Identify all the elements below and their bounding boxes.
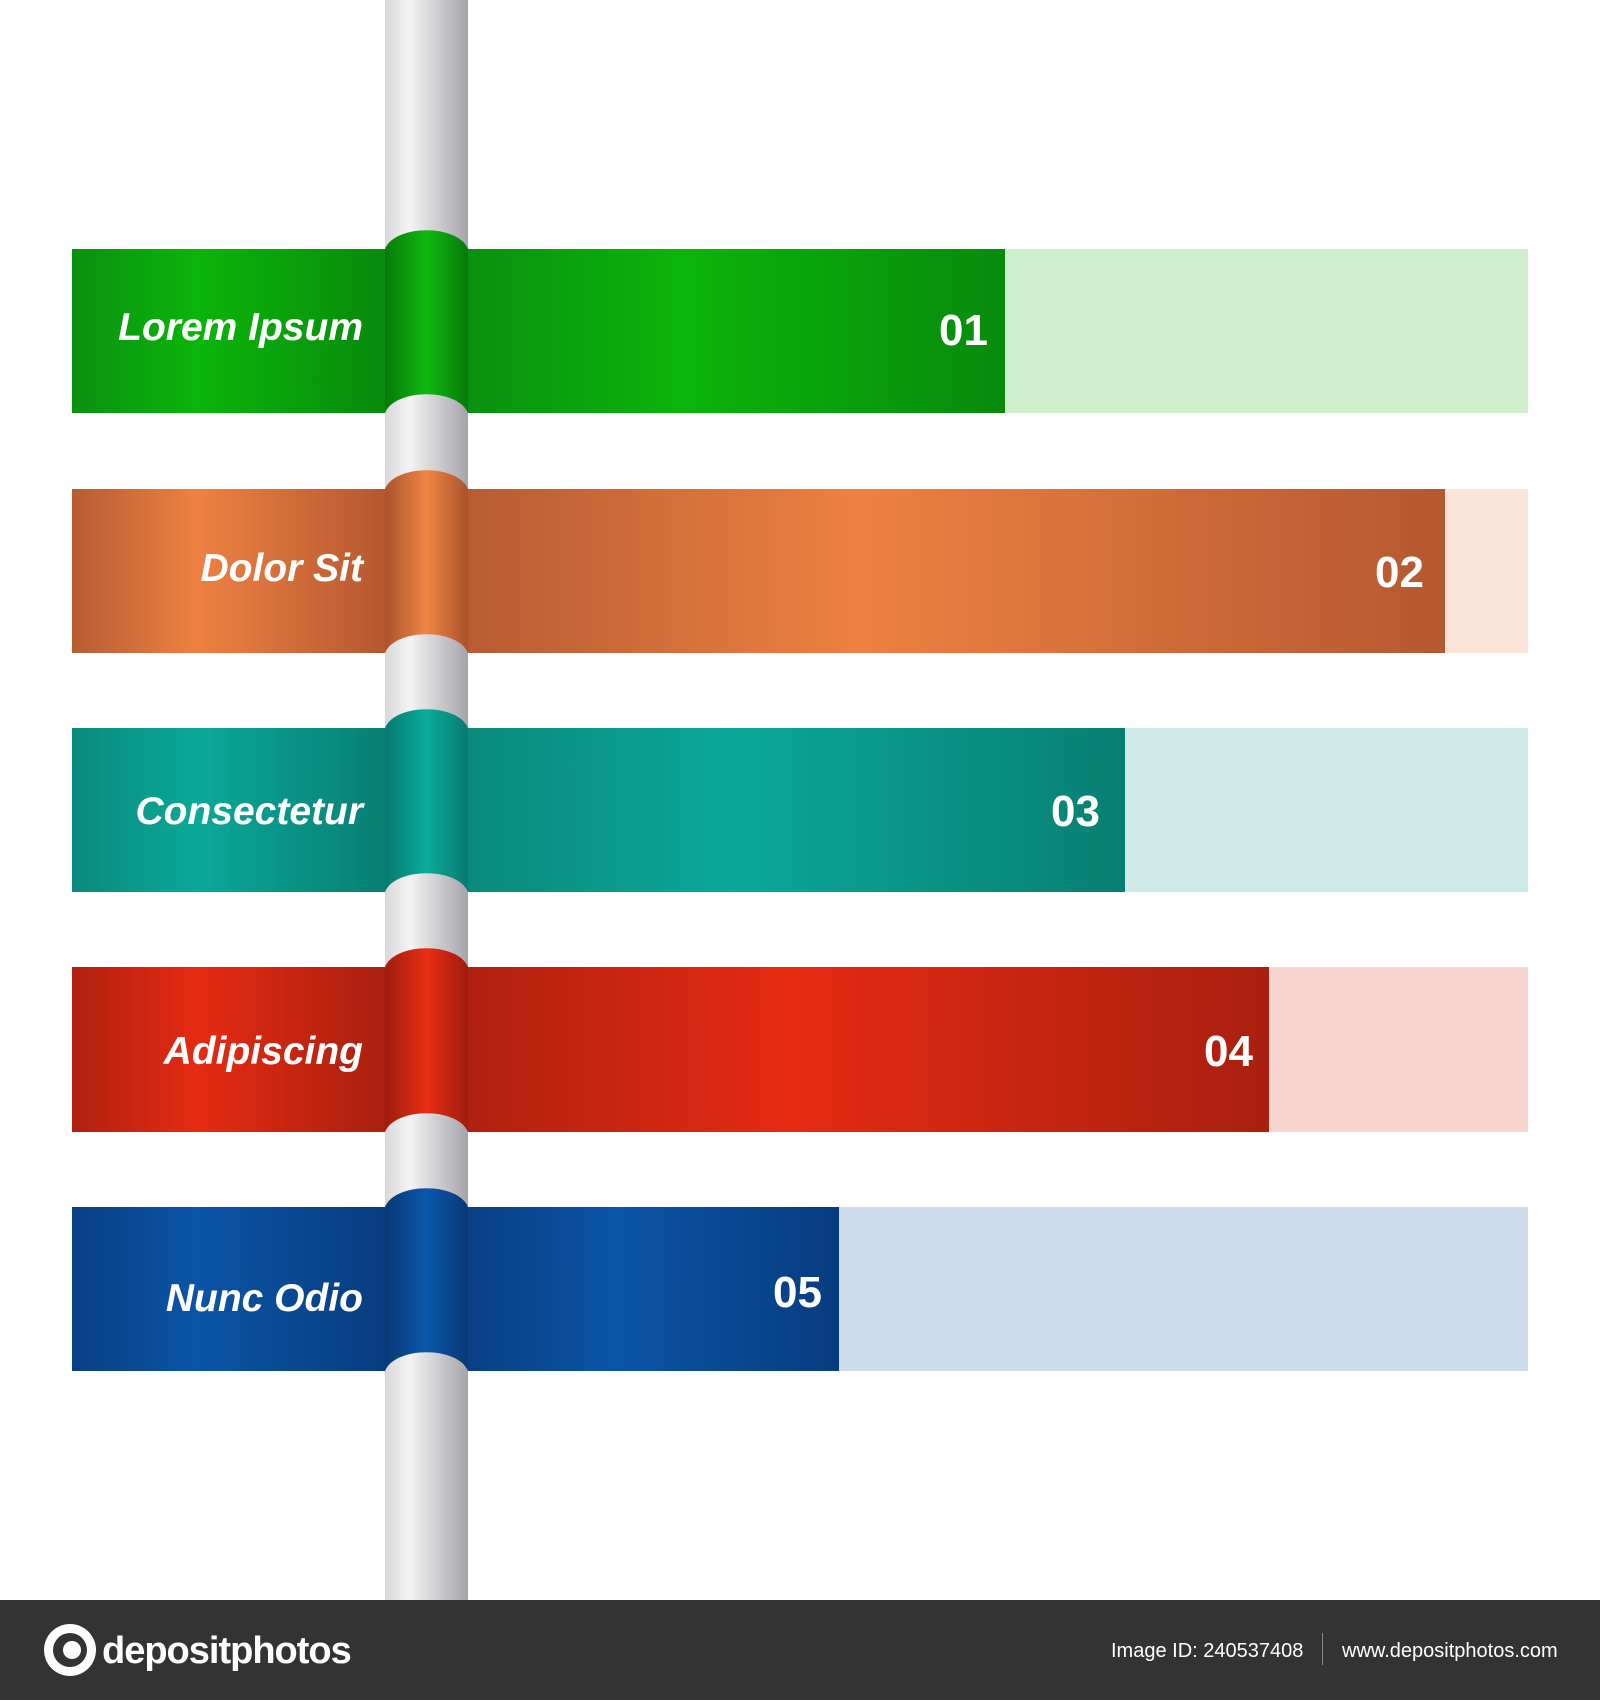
- footer: depositphotos: [102, 1630, 351, 1672]
- pole: [385, 0, 468, 1600]
- bar 5: Nunc Odio: 05: [773, 1268, 822, 1317]
- bar 2: Dolor Sit: Dolor Sit: [200, 547, 365, 590]
- bar 2: Dolor Sit: [72, 470, 1528, 653]
- bar 1: Lorem Ipsum: Lorem Ipsum: [118, 306, 363, 349]
- bar 2: Dolor Sit: 02: [1375, 548, 1424, 597]
- bar 3: Consectetur: Consectetur: [135, 790, 365, 833]
- bar 5: Nunc Odio: Nunc Odio: [166, 1277, 363, 1320]
- footer: Image ID: 240537408: [1111, 1640, 1303, 1662]
- bar 1: Lorem Ipsum: [72, 230, 1528, 413]
- bar 4: Adipiscing: Adipiscing: [163, 1030, 363, 1073]
- icon: logo: [44, 1624, 96, 1676]
- footer: www.depositphotos.com: [1341, 1640, 1558, 1662]
- bar 5: Nunc Odio: [72, 1188, 1528, 1371]
- bar 3: Consectetur: [72, 709, 1528, 892]
- bar 1: Lorem Ipsum: 01: [939, 306, 988, 355]
- bar 3: Consectetur: 03: [1051, 787, 1100, 836]
- bar 4: Adipiscing: [72, 948, 1528, 1132]
- footer: [0, 1600, 1600, 1700]
- bar 4: Adipiscing: 04: [1204, 1027, 1254, 1076]
